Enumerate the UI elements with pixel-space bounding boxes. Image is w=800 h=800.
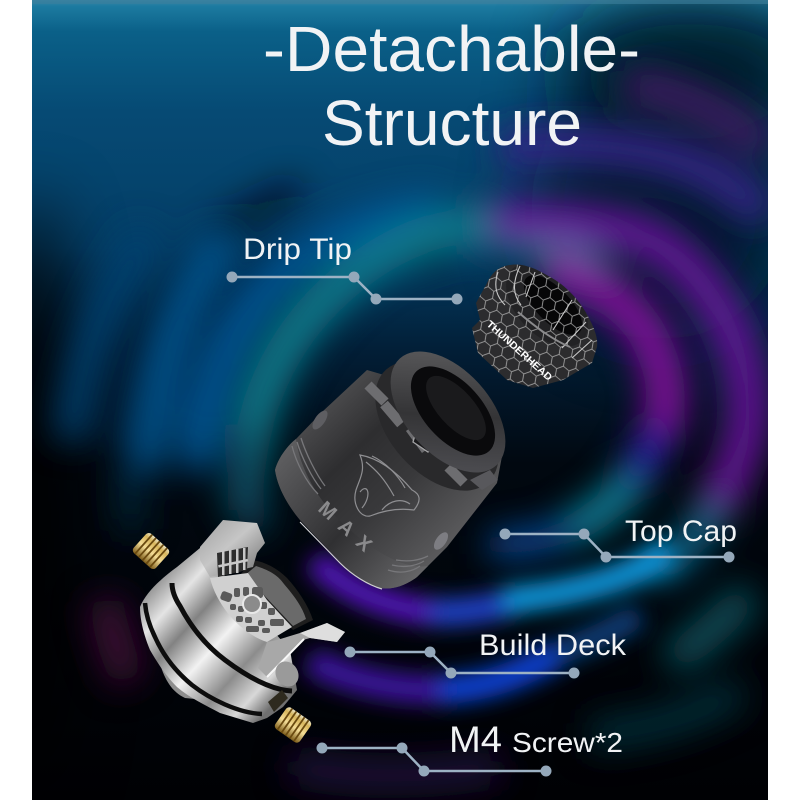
label: M4 Screw*2: Screw*2 <box>512 727 623 758</box>
label: M4 Screw*2 <box>449 719 623 760</box>
leader line: Build Deck <box>344 646 580 678</box>
deck post, lower <box>258 623 345 677</box>
top ring <box>369 330 527 494</box>
icon: grub screw, lower <box>273 706 313 744</box>
title: Structure <box>322 87 582 159</box>
label: Drip Tip: Drip Tip <box>243 233 352 266</box>
icon: grub screw, upper <box>131 531 171 571</box>
icon: build deck product <box>140 520 345 723</box>
label: M4 Screw*2: M4 <box>449 719 502 760</box>
leader line: Top Cap <box>500 528 734 562</box>
icon: top cap product <box>275 330 527 589</box>
icon: drip tip product <box>472 264 598 388</box>
deck plate <box>210 573 292 642</box>
title <box>263 13 640 159</box>
label: Build Deck: Build Deck <box>479 629 627 662</box>
title: -Detachable- <box>263 13 640 85</box>
leader line: M4 Screw <box>316 742 552 776</box>
logo on top cap <box>355 455 419 516</box>
MAX lettering: MAX <box>314 497 376 557</box>
label: Top Cap: Top Cap <box>625 515 737 548</box>
crown collar <box>351 338 523 514</box>
logo text on drip tip: THUNDERHEAD <box>484 319 554 383</box>
leader line: Drip Tip <box>226 272 462 304</box>
deck post, upper <box>200 520 265 577</box>
